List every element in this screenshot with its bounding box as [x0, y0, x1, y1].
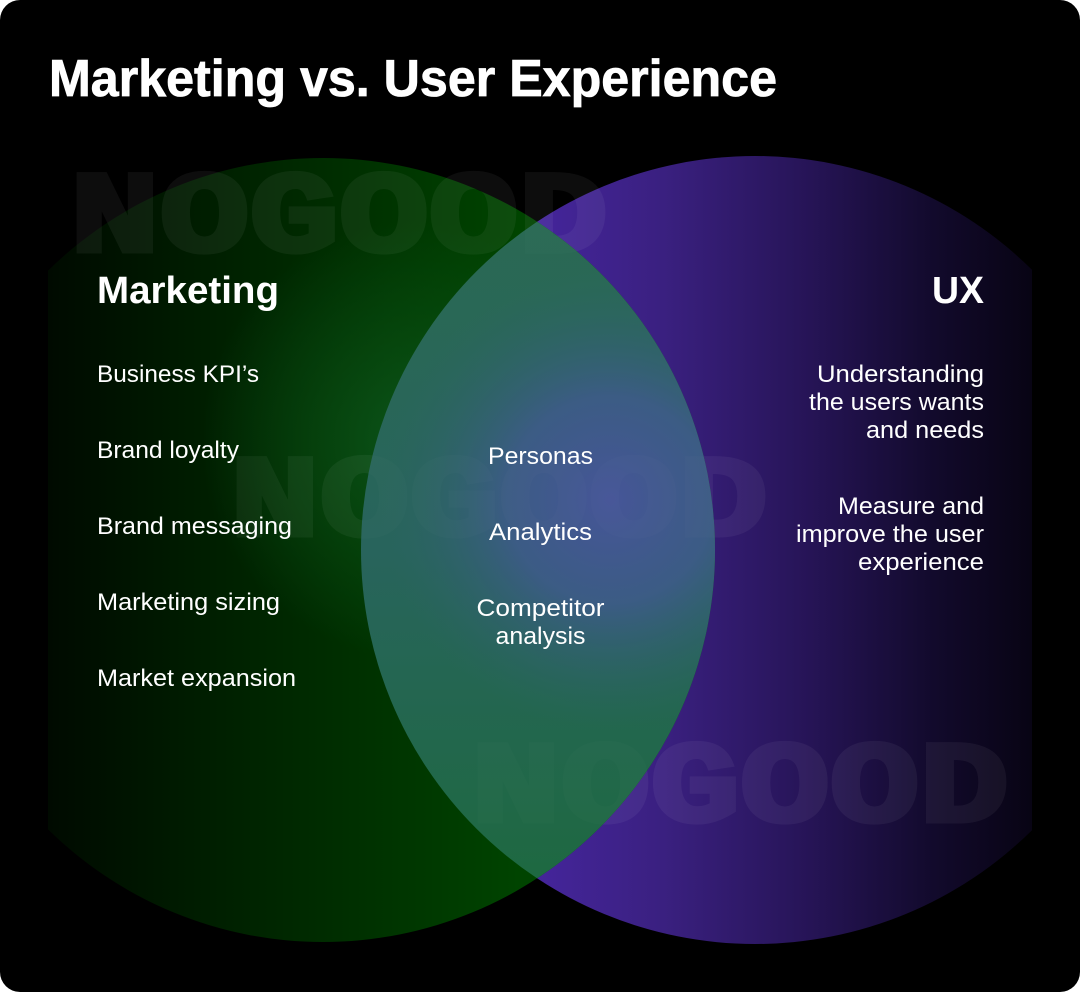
circle: UX: [537, 156, 1032, 944]
item: Market expansion: Market expansion: [97, 665, 296, 692]
item: measure: [796, 493, 984, 576]
circle: Marketing: [0, 158, 715, 942]
item: measure: improve the user: [796, 521, 984, 548]
item: measure: experience: [858, 549, 984, 576]
watermark: middle: NOGOOD: [230, 438, 768, 570]
title: Marketing vs. User Experience: [49, 50, 777, 108]
item: Competitor analysis: Competitor: [476, 595, 605, 622]
item: Marketing sizing: Marketing sizing: [97, 589, 280, 616]
panel: ux: [796, 270, 985, 576]
item: understanding: Understanding: [817, 361, 984, 388]
item: measure: Measure and: [838, 493, 984, 520]
overlap region: [361, 222, 715, 878]
item: Competitor analysis: [476, 595, 605, 650]
item: Analytics: Analytics: [489, 519, 592, 546]
watermarks: [70, 154, 1009, 856]
panel: marketing: [97, 270, 296, 692]
watermark: top: NOGOOD: [70, 154, 608, 286]
item: understanding: the users wants: [809, 389, 984, 416]
item: Brand messaging: Brand messaging: [97, 513, 292, 540]
item: Business KPI's: Business KPI’s: [97, 361, 259, 388]
item: understanding: [809, 361, 984, 444]
heading: UX: UX: [932, 270, 985, 312]
watermark: bottom: NOGOOD: [471, 724, 1009, 856]
item: Competitor analysis: analysis: [496, 623, 586, 650]
item: Brand loyalty: Brand loyalty: [97, 437, 239, 464]
venn diagram: [0, 156, 1080, 944]
panel: overlap: [476, 443, 605, 650]
heading: Marketing: Marketing: [97, 270, 279, 312]
item: understanding: and needs: [866, 417, 984, 444]
item: Personas: Personas: [488, 443, 593, 470]
